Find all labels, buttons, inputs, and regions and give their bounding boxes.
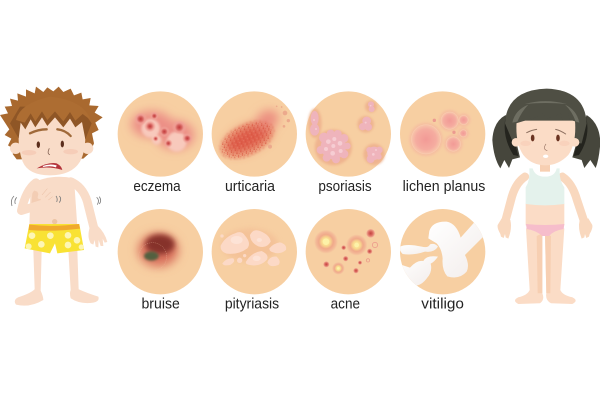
boy: fringe bbox=[16, 97, 91, 123]
girl: neck bbox=[540, 162, 550, 172]
depigmented patches bbox=[400, 222, 487, 286]
plaques bbox=[310, 101, 383, 163]
girl: belly bbox=[526, 203, 564, 225]
boy: scratching arm bbox=[21, 183, 43, 211]
boy: shorts polka dots bbox=[26, 232, 84, 250]
panel: urticaria bbox=[212, 91, 297, 195]
skin disc bbox=[306, 91, 391, 177]
inflamed area bbox=[131, 111, 194, 150]
panel: bruise bbox=[118, 209, 203, 312]
dark core bbox=[145, 234, 175, 254]
girl: hair dome bbox=[505, 89, 587, 143]
girl: nose bbox=[544, 144, 547, 151]
girl: pink underwear bbox=[526, 224, 564, 236]
panel: vitiligo bbox=[400, 209, 487, 312]
large pustules bbox=[314, 230, 367, 275]
girl: tank top bbox=[526, 168, 564, 205]
skin disc bbox=[212, 209, 297, 294]
lesions bbox=[134, 112, 193, 148]
character: girl bbox=[492, 89, 600, 304]
label: bruise bbox=[141, 296, 180, 312]
boy: fringe shadow bbox=[10, 107, 92, 139]
boy: yellow shorts bbox=[25, 224, 84, 253]
label: urticaria bbox=[225, 179, 275, 195]
boy: mouth bbox=[37, 163, 62, 170]
girl: left pigtail bbox=[492, 115, 520, 168]
girl: legs and feet bbox=[515, 228, 543, 304]
pale patches bbox=[220, 230, 286, 266]
skin disc bbox=[400, 91, 485, 177]
red rash bbox=[220, 106, 282, 161]
panel: lichen planus bbox=[400, 91, 485, 195]
small spots bbox=[433, 119, 456, 134]
speckle field bbox=[212, 112, 281, 168]
girl: pigtail shadows bbox=[505, 117, 587, 156]
boy: ears bbox=[10, 143, 93, 154]
scale highlights bbox=[313, 105, 377, 156]
skin disc bbox=[118, 209, 203, 294]
boy: fingers bbox=[39, 185, 55, 204]
boy: face bbox=[19, 114, 85, 175]
boy: shorts waistband bbox=[29, 224, 80, 231]
ring spots bbox=[366, 242, 378, 262]
papules bbox=[411, 112, 468, 154]
boy: hair back bbox=[0, 87, 103, 159]
boy: torso bbox=[29, 177, 77, 227]
boy: eyebrows bbox=[30, 129, 71, 136]
girl: eyebrows bbox=[527, 129, 566, 134]
panel: psoriasis bbox=[306, 91, 391, 195]
girl: fringe bbox=[516, 103, 576, 123]
girl: leg shading bbox=[537, 233, 551, 293]
label: pityriasis bbox=[225, 296, 279, 312]
green centre bbox=[144, 251, 159, 261]
red spots bbox=[323, 229, 375, 273]
boy: right leg and foot bbox=[68, 250, 99, 303]
skin disc bbox=[400, 209, 485, 294]
girl: hair shine bbox=[512, 101, 579, 123]
skin disc bbox=[306, 209, 391, 294]
boy: torso shadow by arm bbox=[31, 190, 43, 211]
girl: face bbox=[516, 121, 575, 165]
outlying spots bbox=[268, 105, 290, 149]
halos bbox=[409, 110, 470, 156]
plaque halos bbox=[308, 101, 385, 165]
label: acne bbox=[331, 296, 360, 312]
dashed outline bbox=[139, 243, 167, 271]
label: lichen planus bbox=[403, 179, 485, 195]
boy: cheeks bbox=[22, 149, 78, 155]
pale blisters bbox=[141, 119, 187, 152]
girl: ears bbox=[512, 138, 579, 147]
boy: right hand bbox=[88, 225, 107, 247]
girl: left arm bbox=[506, 177, 525, 220]
label: psoriasis bbox=[318, 179, 372, 195]
pustule heads bbox=[323, 238, 359, 270]
label: eczema bbox=[133, 179, 181, 195]
label: vitiligo bbox=[421, 296, 464, 312]
girl: eyes bbox=[531, 135, 560, 141]
panel: pityriasis bbox=[212, 209, 297, 312]
girl: left hand bbox=[498, 218, 511, 239]
girl: mouth bbox=[543, 155, 548, 158]
boy: shake marks bbox=[11, 196, 101, 206]
skin disc bbox=[118, 91, 203, 177]
patch halo bbox=[222, 228, 278, 262]
boy: nose bbox=[48, 148, 50, 155]
girl: cheeks bbox=[520, 141, 570, 146]
boy: navel bbox=[52, 219, 57, 224]
panel: eczema bbox=[118, 91, 203, 195]
patch highlights bbox=[231, 236, 262, 261]
outer redness bbox=[138, 233, 178, 267]
girl: right pigtail bbox=[572, 115, 600, 168]
boy: eyes bbox=[37, 141, 64, 148]
girl: right hand bbox=[579, 218, 592, 239]
character: boy scratching bbox=[0, 87, 107, 306]
boy: right arm bbox=[71, 182, 94, 228]
panel: acne bbox=[306, 209, 391, 312]
girl: right arm bbox=[562, 177, 584, 220]
boy: left leg and foot bbox=[15, 250, 43, 306]
boy: finger lines bbox=[42, 189, 53, 200]
skin disc bbox=[212, 91, 297, 177]
